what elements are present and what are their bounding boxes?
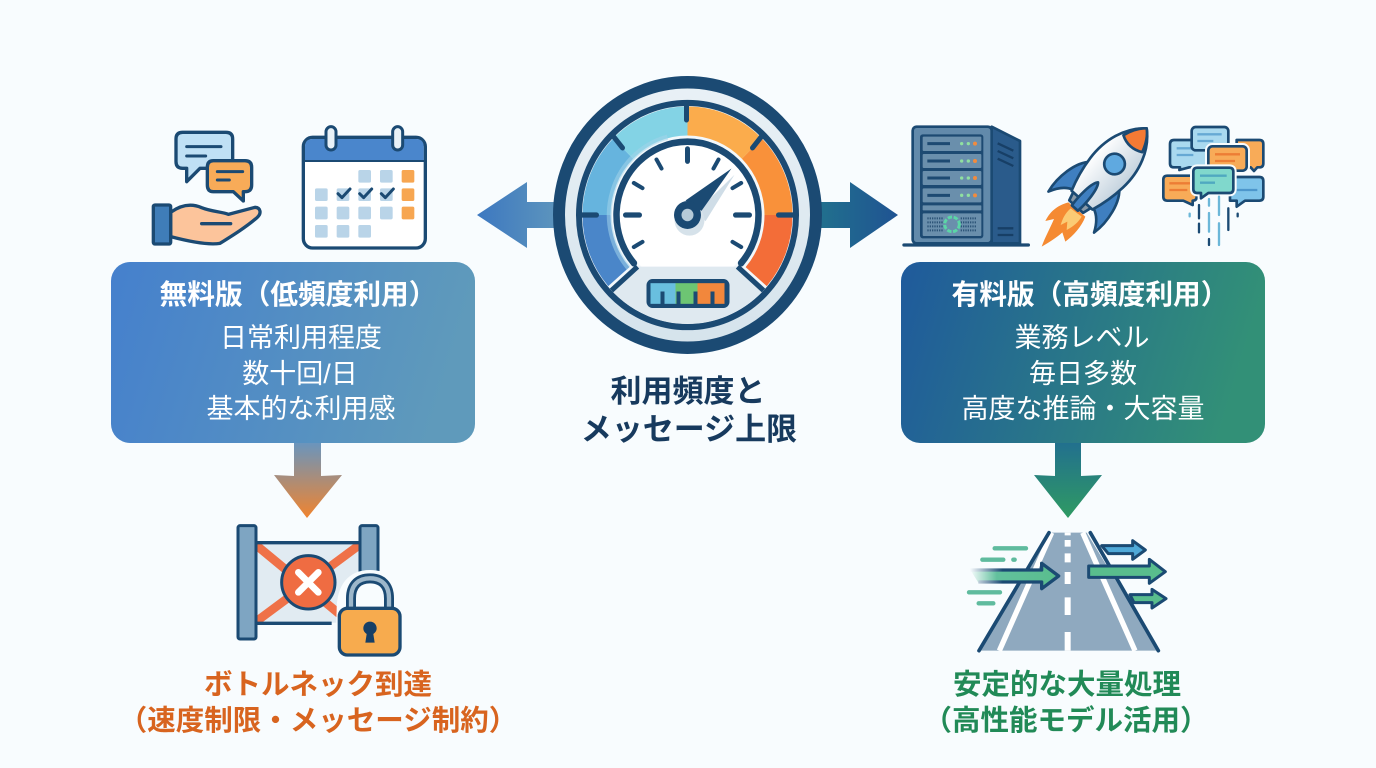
paid plan details: [962, 323, 1204, 424]
icon: calendar: [303, 127, 425, 248]
caption: stable processing: （高性能モデル活用）: [923, 704, 1209, 737]
arrow: paid plan to stable processing: [1034, 443, 1102, 518]
title: メッセージ上限: [581, 412, 797, 447]
arrow: gauge to free plan: [477, 182, 556, 248]
panel: free plan: [111, 262, 475, 443]
needle: [698, 175, 734, 221]
free plan details: 日常利用程度: [220, 323, 382, 353]
bottom panel: [612, 267, 764, 324]
icon: speedometer gauge: [559, 82, 816, 348]
free plan details: 基本的な利用感: [206, 394, 396, 424]
paid plan details: 毎日多数: [1029, 359, 1137, 389]
caption: bottleneck: （速度制限・メッセージ制約）: [119, 705, 517, 737]
free plan heading: 無料版（低頻度利用）: [160, 279, 436, 310]
icon: server: [904, 127, 1028, 245]
paid plan heading: 有料版（高頻度利用）: [952, 279, 1228, 310]
arrow: free plan to bottleneck: [274, 443, 342, 518]
caption: bottleneck: ボトルネック到達: [204, 669, 432, 701]
caption: bottleneck: [119, 669, 517, 737]
paid plan details: 業務レベル: [1014, 323, 1150, 353]
mini meter: [646, 279, 730, 308]
icon: rocket: [1042, 107, 1170, 247]
icon: highway with arrows: [969, 533, 1166, 651]
arrow: gauge to paid plan: [820, 182, 898, 248]
caption: stable processing: [923, 669, 1209, 737]
free plan details: [206, 323, 396, 424]
icon: many chat bubbles: [1163, 127, 1263, 245]
caption: stable processing: 安定的な大量処理: [953, 669, 1181, 701]
icon: hand with chat bubbles: [153, 132, 260, 244]
icon: barrier with lock: [238, 526, 403, 658]
panel: paid plan: [901, 262, 1265, 443]
title: [581, 374, 797, 447]
title: 利用頻度と: [610, 374, 766, 409]
free plan details: 数十回/日: [242, 359, 358, 389]
paid plan details: 高度な推論・大容量: [962, 394, 1204, 424]
